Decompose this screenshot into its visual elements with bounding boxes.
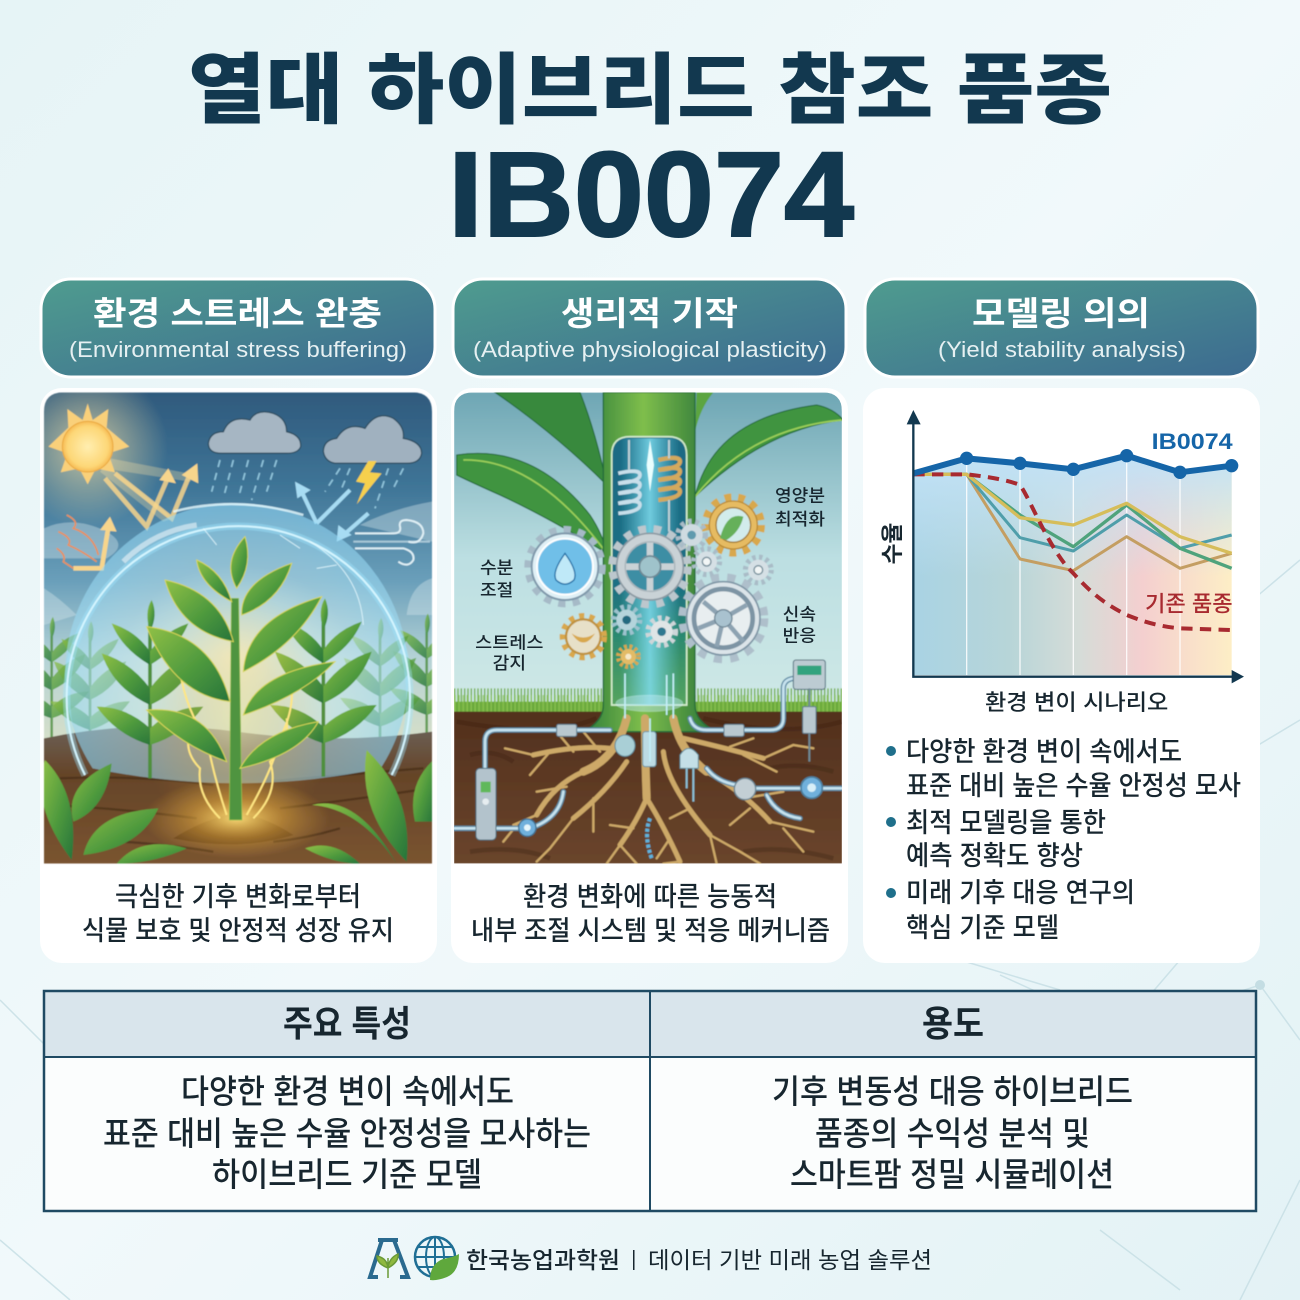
labels	[475, 486, 825, 673]
icon: flask with plant	[370, 1240, 408, 1278]
grass	[454, 700, 842, 715]
footer	[370, 1237, 932, 1280]
header: environmental stress buffering: 환경 스트레스 완충	[93, 295, 382, 332]
line chart: yield vs environmental variation: IB0074	[1152, 429, 1234, 454]
labels: 조절	[480, 580, 513, 600]
bullet list: 핵심 기준 모델	[906, 913, 1059, 943]
title	[188, 48, 1112, 262]
bullet list: 다양한 환경 변이 속에서도	[906, 737, 1182, 767]
labels: 반응	[783, 626, 816, 646]
column: uses: 품종의 수익성 분석 및	[815, 1115, 1090, 1152]
springs	[618, 471, 640, 513]
line chart: yield vs environmental variation: 환경 변이 시나리오	[985, 690, 1168, 715]
column: uses: 스마트팜 정밀 시뮬레이션	[790, 1156, 1114, 1193]
bullet list: 최적 모델링을 통한	[906, 808, 1106, 838]
header: yield stability analysis	[865, 279, 1258, 377]
bullet list	[886, 737, 1241, 943]
footer: 한국농업과학원	[466, 1247, 620, 1273]
bullet list: 미래 기후 대응 연구의	[906, 878, 1135, 908]
labels: 스트레스	[475, 632, 544, 652]
column: uses: 기후 변동성 대응 하이브리드	[772, 1073, 1133, 1110]
caption: 환경 변화에 따른 능동적	[523, 882, 777, 912]
header: adaptive physiological plasticity	[453, 279, 846, 377]
panel: physiological mechanism	[451, 388, 848, 963]
roots	[503, 718, 813, 864]
table: key traits and uses	[44, 991, 1256, 1211]
labels: 수분	[480, 557, 513, 577]
illustration: gears inside plant stem	[454, 392, 843, 864]
line chart: yield vs environmental variation: 수율	[880, 523, 905, 564]
bullet list: 표준 대비 높은 수율 안정성 모사	[906, 771, 1241, 801]
bullet list: 예측 정확도 향상	[906, 841, 1083, 871]
column: key traits: 하이브리드 기준 모델	[212, 1156, 482, 1193]
caption: 극심한 기후 변화로부터	[115, 882, 361, 912]
title: IB0074	[448, 126, 854, 262]
column: uses	[772, 1003, 1133, 1193]
caption: 내부 조절 시스템 및 적응 메커니즘	[471, 916, 830, 946]
caption: 식물 보호 및 안정적 성장 유지	[82, 916, 394, 946]
column: key traits: 다양한 환경 변이 속에서도	[181, 1073, 514, 1110]
header: yield stability analysis: 모델링 의의	[972, 295, 1150, 332]
header: environmental stress buffering: (Environmental stress buffering)	[69, 337, 407, 362]
labels: 신속	[783, 604, 816, 624]
column: key traits: 주요 특성	[283, 1003, 411, 1044]
line chart: yield vs environmental variation: 기존 품종	[1145, 592, 1233, 617]
icon: globe with leaf	[415, 1237, 459, 1280]
panel: modelling significance	[863, 388, 1260, 963]
labels: 감지	[493, 653, 526, 673]
title: 열대 하이브리드 참조 품종	[188, 48, 1112, 134]
labels: 영양분	[775, 486, 825, 506]
caption	[471, 882, 830, 946]
caption	[82, 882, 394, 946]
column: key traits	[103, 1003, 591, 1193]
pipes and sensors	[454, 678, 842, 828]
header: yield stability analysis: (Yield stability analysis)	[938, 337, 1186, 362]
line chart: yield vs environmental variation	[880, 410, 1244, 715]
gears	[529, 498, 771, 667]
illustration: protective dome over crop	[43, 392, 433, 864]
header: adaptive physiological plasticity: (Adaptive physiological plasticity)	[473, 337, 827, 362]
panel: environmental stress buffering	[40, 388, 437, 963]
labels: 최적화	[775, 509, 825, 529]
header: adaptive physiological plasticity: 생리적 기작	[561, 295, 738, 332]
column: uses: 용도	[922, 1003, 984, 1044]
header: environmental stress buffering	[41, 279, 435, 377]
column: key traits: 표준 대비 높은 수율 안정성을 모사하는	[103, 1115, 591, 1152]
footer: 데이터 기반 미래 농업 솔루션	[648, 1247, 932, 1273]
